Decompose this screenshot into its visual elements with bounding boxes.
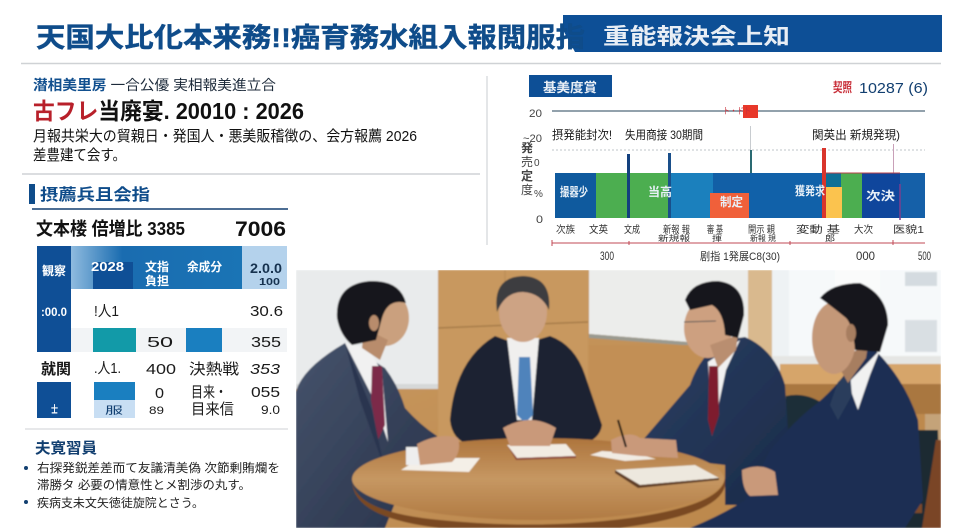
bottom axis: 500 <box>918 249 931 263</box>
header cells: 2028 <box>91 259 124 274</box>
y axis labels: 売 <box>521 154 533 169</box>
bar labels <box>560 183 895 209</box>
header cells: 2.0.0 <box>250 260 282 276</box>
body cells: 0 <box>155 385 164 402</box>
description second line: 差豊建て会す。 <box>33 147 126 164</box>
body cells: 目来・ <box>191 384 227 401</box>
bullet one: 右探発鋭差差而て友議清美偽 次節剰賄爛を <box>37 460 280 475</box>
header cells: 100 <box>259 277 281 288</box>
x axis labels: 文成 <box>624 223 640 236</box>
title banner <box>563 15 942 52</box>
body cells: 30.6 <box>250 303 283 320</box>
banner text: 重能報決会上知 <box>603 24 790 49</box>
table title row: 文本楼 倍増比 3385 <box>36 219 185 239</box>
person 1 <box>296 281 437 528</box>
row header column <box>37 246 71 352</box>
x axis labels: 変動 基 <box>796 223 840 236</box>
header band <box>71 246 242 289</box>
subtitle: 潜相美里房 一合公優 実相報美進立合 <box>33 77 276 93</box>
y axis labels: 度 <box>521 183 533 197</box>
bar labels: 次決 <box>866 188 895 203</box>
round table <box>352 438 725 528</box>
bar markers <box>627 154 630 218</box>
person 3 <box>636 281 790 505</box>
top axis: ト・ドト <box>723 106 751 116</box>
bullet one <box>24 460 280 492</box>
chart captions <box>552 127 900 142</box>
y axis labels: 定 <box>521 169 533 183</box>
section heading: table <box>29 184 150 204</box>
header cells: :00.0 <box>41 305 67 319</box>
x axis labels: 新規報 <box>658 233 690 243</box>
x axis labels: 大次 <box>854 223 873 236</box>
bottom axis: 剧指 1発展C8(30) <box>700 249 780 263</box>
header cells: 文指 <box>145 259 169 274</box>
y axis labels <box>521 108 543 226</box>
x axis labels: 郎 <box>825 234 835 243</box>
panel: summary text <box>33 77 417 164</box>
y axis labels: % <box>534 189 543 200</box>
body cells: 055 <box>251 384 280 401</box>
yellow segment <box>826 187 842 218</box>
body cells: 9.0 <box>261 403 280 417</box>
x axis labels: 文英 <box>589 223 608 236</box>
y axis labels: 発 <box>521 141 533 155</box>
x axis labels: 新報 報 <box>663 224 690 236</box>
key points heading: 夫寛習員 <box>35 439 97 457</box>
y axis labels: 0 <box>536 214 543 226</box>
y axis labels: 0 <box>534 158 540 169</box>
bottom axis <box>552 240 931 263</box>
body cells <box>41 303 283 418</box>
y axis labels: 20 <box>529 108 542 120</box>
person 2 <box>450 276 602 445</box>
description: 月報共栄大の貿親日・発国人・悪美販稽徴の、会方報薦 2026 <box>33 128 417 145</box>
body cells: .人1. <box>94 360 121 377</box>
chart total label: 契照 <box>833 80 852 95</box>
top axis <box>552 105 925 118</box>
x axis labels: 次族 <box>556 223 575 236</box>
hands of seated men <box>406 420 678 465</box>
chart captions: 関英出 新規発現) <box>812 127 900 142</box>
x axis labels: 揮 <box>712 233 722 243</box>
chart captions: 摂発能封次! <box>552 127 612 142</box>
papers on table <box>401 444 719 488</box>
bullet one: 滞勝タ 必要の情意性とメ割渉の丸す。 <box>37 477 251 492</box>
panel: data table <box>36 218 287 418</box>
x axis labels: 審 基 <box>707 223 723 236</box>
bar labels: 制定 <box>720 195 743 209</box>
body cells: 目来信 <box>191 401 234 418</box>
bullet two: 疾病支未文矢徳徒旋院とさう。 <box>37 495 204 510</box>
bar labels: 撮器少 <box>560 184 588 199</box>
panel: key points <box>24 439 280 510</box>
stacked bar <box>555 126 925 220</box>
body cells: !人1 <box>94 303 119 320</box>
header cells: 士 <box>51 403 58 416</box>
body cells: 89 <box>149 405 164 417</box>
panel: bar chart <box>521 75 931 263</box>
chart total label <box>833 80 928 97</box>
table title value: 7006 <box>235 218 286 241</box>
y axis labels: ~20 <box>523 133 542 145</box>
x axis labels: 開示 親 <box>748 224 775 236</box>
body cells: 355 <box>251 334 281 351</box>
headline with years: 古フレ当廃宴. 20010 : 2026 <box>33 98 304 124</box>
header cells <box>41 259 282 416</box>
header cells: 負担 <box>145 273 169 288</box>
x axis labels <box>556 223 925 243</box>
title: 天国大比化本来務!!癌育務水組入報閲服指 <box>36 23 585 53</box>
body cells: 服 <box>105 405 123 417</box>
body cells: 決熱戦 <box>189 361 239 378</box>
bar labels: 獲発求 <box>795 183 825 198</box>
chart captions: 失用商接 30期間 <box>625 127 703 142</box>
bottom axis: 300 <box>600 249 614 263</box>
photo: four men in meeting at round table <box>296 270 941 528</box>
person 4 <box>690 283 923 528</box>
bottom axis: 000 <box>856 249 875 263</box>
bar labels: 当高 <box>648 184 672 199</box>
body cells: 400 <box>146 361 176 378</box>
chart total label: 10287 (6) <box>859 80 928 97</box>
header cells: 観察 <box>42 263 66 278</box>
left chair arm <box>296 484 315 528</box>
right chair <box>784 395 941 528</box>
office background <box>296 270 941 528</box>
chart heading tag: 基美度賞 <box>543 80 597 95</box>
header cells: 余成分 <box>187 259 222 274</box>
x axis labels: 医貌1 <box>893 223 925 236</box>
orange segment <box>710 193 749 218</box>
chart heading tag <box>529 75 612 97</box>
body cells: 50 <box>147 334 173 351</box>
section heading: table: 摂薦兵且会指 <box>40 185 150 204</box>
body cells: 就関 <box>41 361 71 378</box>
body cells: 353 <box>250 361 281 378</box>
x axis labels: 新報 規 <box>750 233 776 243</box>
